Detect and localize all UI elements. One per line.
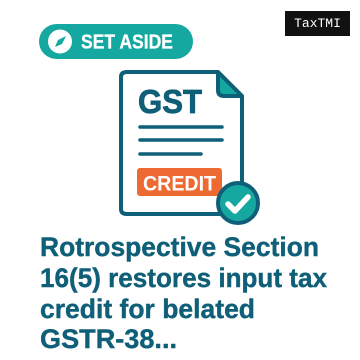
- icon: GST credit document: [119, 70, 260, 225]
- credit label: CREDIT: [143, 172, 216, 196]
- GST heading: GST: [138, 83, 202, 120]
- title: Rotrospective Section: [40, 232, 319, 262]
- title: credit for belated: [40, 294, 255, 324]
- document outline: [121, 72, 242, 214]
- title: 16(5) restores input tax: [40, 263, 327, 293]
- badge: set aside: [39, 24, 193, 59]
- watermark: TaxTMI: [285, 11, 350, 36]
- title: [40, 232, 328, 354]
- title: GSTR-38...: [40, 324, 177, 354]
- text lines: [140, 127, 222, 154]
- watermark: TaxTMI: TaxTMI: [294, 16, 341, 31]
- folded corner: [218, 72, 242, 96]
- check badge: [218, 183, 258, 223]
- badge: set aside: SET ASIDE: [81, 32, 173, 54]
